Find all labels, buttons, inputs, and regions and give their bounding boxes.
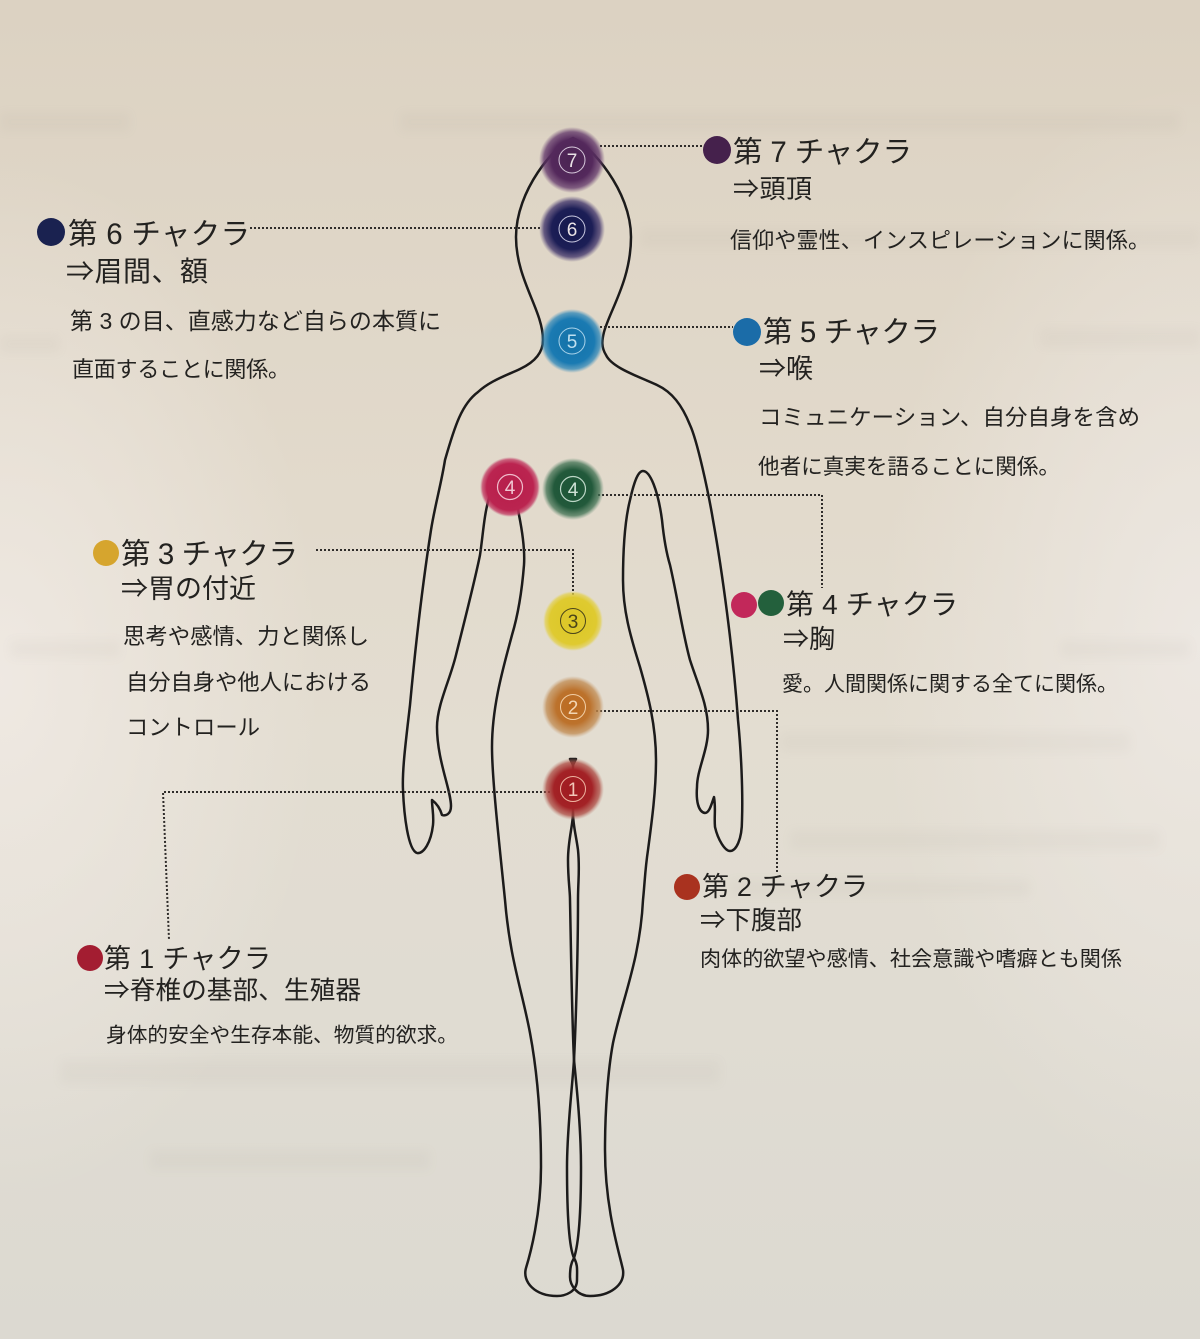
label: chakra 3 bbox=[93, 538, 371, 740]
heading 1: 第 1 チャクラ bbox=[104, 944, 271, 974]
location 6: ⇒眉間、額 bbox=[66, 256, 208, 287]
chakra 2 circle bbox=[542, 676, 604, 738]
description 6: 第 3 の目、直感力など自らの本質に bbox=[70, 308, 441, 334]
location 5: ⇒喉 bbox=[759, 354, 813, 384]
location 2: ⇒下腹部 bbox=[700, 907, 802, 935]
location 3: ⇒胃の付近 bbox=[121, 574, 256, 604]
bullet 6 bbox=[37, 218, 65, 246]
body outline bbox=[403, 138, 742, 1296]
description 5 bbox=[758, 405, 1140, 479]
chakra 6 circle: 6 bbox=[567, 220, 577, 241]
description 3: 自分自身や他人における bbox=[126, 670, 371, 695]
chakra 5 circle bbox=[540, 309, 604, 373]
location 4: ⇒胸 bbox=[783, 624, 835, 654]
chakra 2 circle: 2 bbox=[568, 698, 578, 719]
chakra 4 green circle: 4 bbox=[568, 480, 579, 501]
heading 4: 第 4 チャクラ bbox=[786, 589, 958, 620]
bullet 4 green bbox=[758, 590, 784, 616]
description 4: 愛。人間関係に関する全てに関係。 bbox=[782, 673, 1118, 696]
description 3 bbox=[123, 624, 371, 740]
bullet 1 bbox=[77, 945, 103, 971]
label: chakra 1 bbox=[77, 944, 458, 1047]
location 1: ⇒脊椎の基部、生殖器 bbox=[104, 976, 361, 1005]
location 7: ⇒頭頂 bbox=[733, 174, 812, 204]
label: chakra 5 bbox=[733, 316, 1140, 479]
heading 6: 第 6 チャクラ bbox=[68, 218, 250, 251]
heading 3: 第 3 チャクラ bbox=[121, 538, 298, 571]
label: chakra 6 bbox=[37, 218, 441, 382]
heading 2: 第 2 チャクラ bbox=[702, 872, 868, 902]
description 7: 信仰や霊性、インスピレーションに関係。 bbox=[730, 228, 1150, 253]
chakra 4 pink circle: 4 bbox=[505, 478, 516, 499]
bullet 7 bbox=[703, 136, 731, 164]
chakra 1 circle: 1 bbox=[568, 780, 578, 801]
chakra 3 circle: 3 bbox=[568, 612, 578, 633]
label: chakra 7 bbox=[703, 136, 1150, 253]
leader lines bbox=[163, 146, 822, 940]
chakra 7 circle bbox=[539, 127, 605, 193]
heading 7: 第 7 チャクラ bbox=[733, 136, 912, 169]
label: chakra 4 bbox=[731, 589, 1118, 696]
description 1: 身体的安全や生存本能、物質的欲求。 bbox=[106, 1024, 458, 1047]
description 6: 直面することに関係。 bbox=[72, 357, 290, 382]
label: chakra 2 bbox=[674, 872, 1122, 971]
heading 5: 第 5 チャクラ bbox=[763, 316, 940, 349]
chakra 5 circle: 5 bbox=[567, 332, 577, 353]
bullet 3 bbox=[93, 540, 119, 566]
description 2: 肉体的欲望や感情、社会意識や嗜癖とも関係 bbox=[700, 947, 1122, 971]
chakra 7 circle: 7 bbox=[567, 151, 577, 172]
chakra 6 circle bbox=[539, 196, 605, 262]
description 3: 思考や感情、力と関係し bbox=[123, 624, 369, 649]
chakra 3 circle bbox=[543, 591, 603, 651]
chakra 4 green circle bbox=[542, 458, 604, 520]
chakra 1 circle bbox=[542, 758, 604, 820]
description 5: コミュニケーション、自分自身を含め bbox=[759, 405, 1140, 430]
bullet 2 bbox=[674, 874, 700, 900]
description 5: 他者に真実を語ることに関係。 bbox=[758, 454, 1060, 479]
chakra 4 pink circle bbox=[480, 457, 540, 517]
description 3: コントロール bbox=[126, 715, 260, 740]
description 6 bbox=[70, 308, 441, 382]
bullet 5 bbox=[733, 318, 761, 346]
bullet 4 pink bbox=[731, 592, 757, 618]
